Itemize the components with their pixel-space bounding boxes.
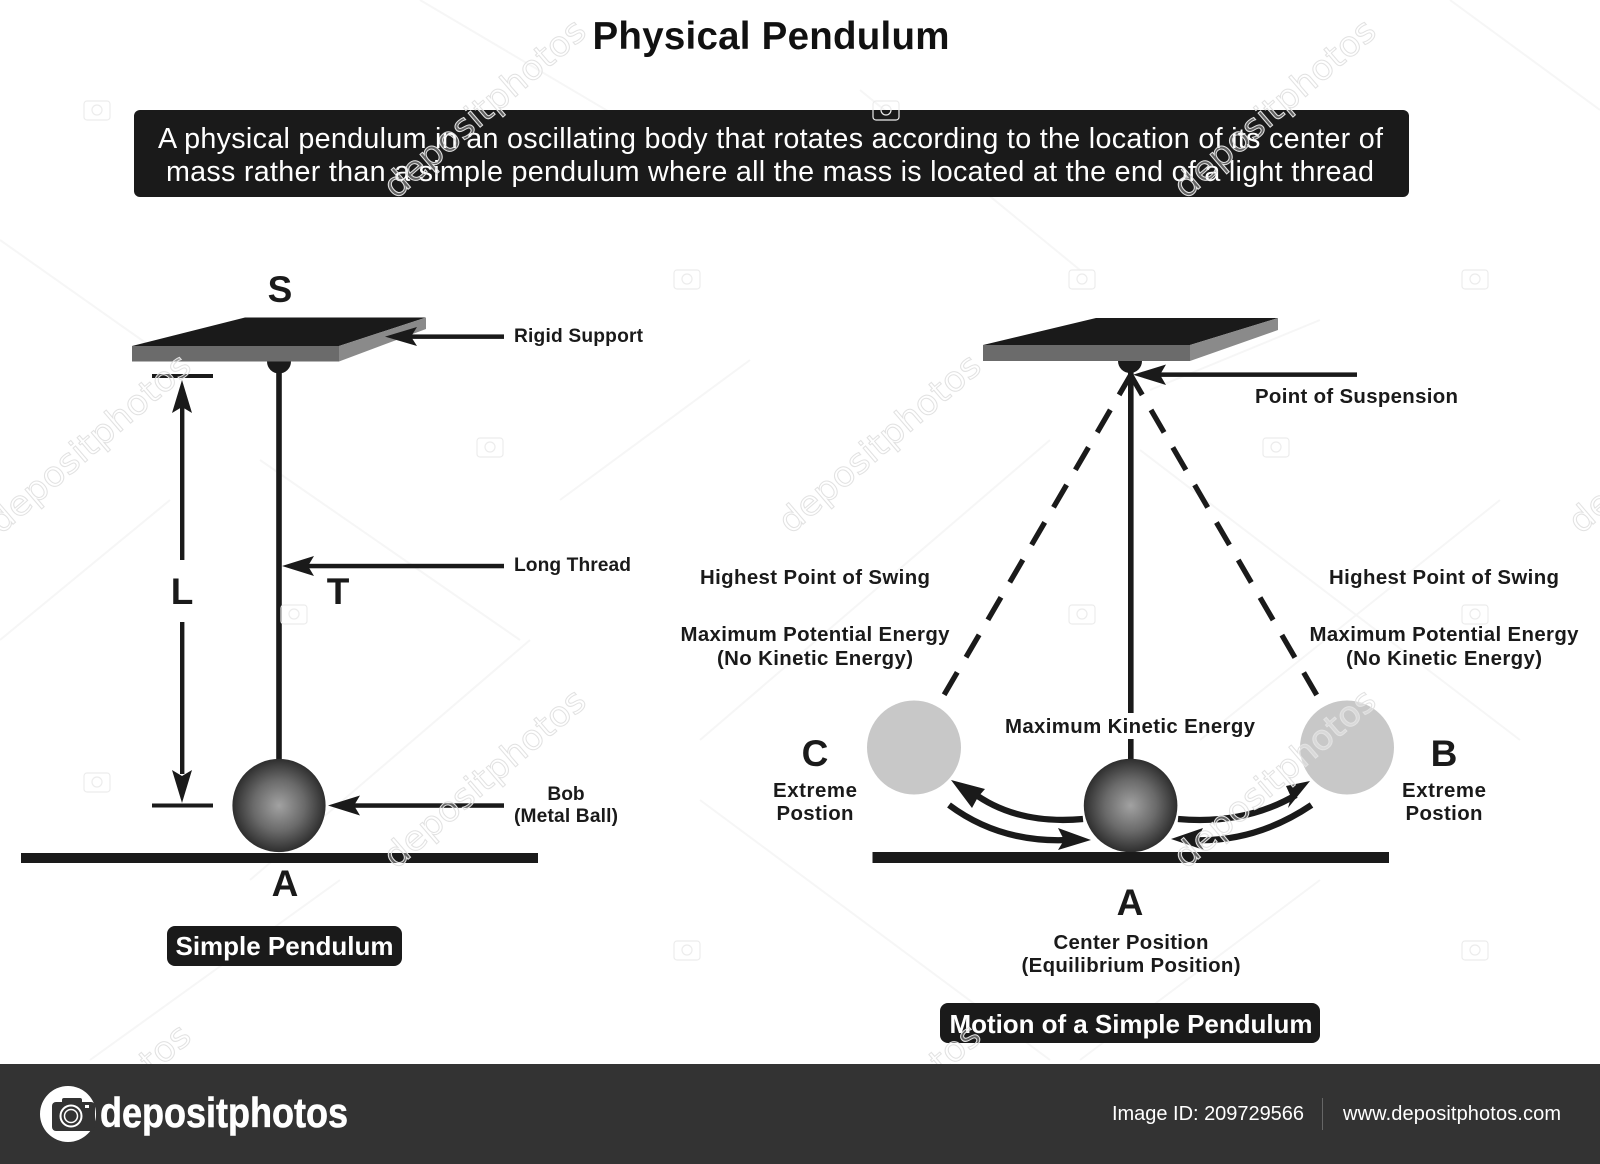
dashed swing line left [944, 375, 1131, 695]
thread with knob [267, 362, 291, 761]
icon: rigid support plate [132, 318, 426, 362]
label: maximum kinetic energy: Maximum Kinetic Energy [1005, 716, 1256, 738]
ground line [21, 853, 538, 863]
callout: rigid support: Rigid Support [514, 326, 644, 347]
icon: camera logo [40, 1086, 96, 1142]
callout: long thread: Long Thread [514, 555, 631, 576]
icon: support plate [983, 318, 1278, 361]
label: L: L [171, 571, 193, 612]
text: right highest point: Highest Point of Swing [1329, 567, 1559, 589]
label: S: S [268, 269, 292, 310]
label: B extreme position: B [1431, 733, 1457, 774]
text: right highest point: Maximum Potential Energy [1310, 624, 1579, 646]
title: Physical Pendulum [592, 15, 950, 58]
label: A center position [1022, 882, 1240, 977]
footer divider [1322, 1098, 1323, 1130]
callout: rigid support [385, 326, 644, 347]
text: right highest point: (No Kinetic Energy) [1346, 648, 1542, 670]
label: motion of a simple pendulum: Motion of a Simple Pendulum [950, 1009, 1312, 1039]
dashed swing line right [1131, 375, 1317, 695]
label: A center position: A [1117, 882, 1143, 923]
label: B extreme position [1402, 733, 1486, 825]
icon: bob [232, 759, 326, 852]
callout: bob: Bob [547, 784, 585, 805]
callout: bob: (Metal Ball) [514, 806, 618, 827]
label: A: A [272, 863, 298, 904]
label: C extreme position: Extreme [773, 780, 857, 802]
text: left highest point [680, 567, 950, 670]
label: simple pendulum [167, 926, 402, 966]
text: right highest point [1310, 567, 1579, 670]
icon: suspension knob [1118, 361, 1142, 373]
watermark camera icons [84, 101, 1488, 960]
label: B extreme position: Extreme [1402, 780, 1486, 802]
ground line [872, 852, 1389, 863]
label: simple pendulum: Simple Pendulum [176, 931, 394, 961]
watermarks: depositphotos [1166, 11, 1384, 207]
logo wordmark: depositphotos [100, 1089, 348, 1136]
center thread [1128, 372, 1134, 761]
watermarks: depositphotos [771, 346, 989, 542]
icon: center ball [1084, 759, 1177, 852]
callout: point of suspension: Point of Suspension [1255, 386, 1458, 408]
length dimension arrow L [152, 374, 213, 808]
callout: long thread [282, 555, 631, 576]
watermarks: depositphotos [376, 11, 594, 207]
watermarks: depositphotos [376, 681, 594, 877]
watermarks: depositphotos [1166, 681, 1384, 877]
image id: Image ID: 209729566 [1112, 1103, 1304, 1125]
definition banner: A physical pendulum in an oscillating body that rotates according to the location of its center of [158, 123, 1384, 155]
icon: ball right extreme [1300, 700, 1394, 794]
text: left highest point: Maximum Potential Energy [680, 624, 950, 646]
motion arrows [949, 780, 1312, 850]
panel: motion of a simple pendulum [680, 318, 1579, 1043]
label: A center position: Center Position [1054, 932, 1208, 954]
label: C extreme position [773, 733, 857, 825]
panel: simple pendulum [21, 269, 644, 966]
definition banner: mass rather than a simple pendulum where all the mass is located at the end of a light thread [166, 156, 1374, 188]
text: left highest point: (No Kinetic Energy) [717, 648, 913, 670]
callout: point of suspension [1133, 364, 1458, 408]
icon: ball left extreme [867, 700, 961, 794]
footer bar [0, 1064, 1600, 1164]
label: B extreme position: Postion [1406, 803, 1482, 825]
definition banner [134, 110, 1409, 197]
site url: www.depositphotos.com [1342, 1103, 1561, 1125]
label: C extreme position: C [802, 733, 828, 774]
callout: bob [328, 784, 618, 827]
label: T: T [327, 571, 350, 612]
label: A center position: (Equilibrium Position) [1022, 955, 1240, 977]
text: left highest point: Highest Point of Swing [700, 567, 930, 589]
label: C extreme position: Postion [776, 803, 854, 825]
